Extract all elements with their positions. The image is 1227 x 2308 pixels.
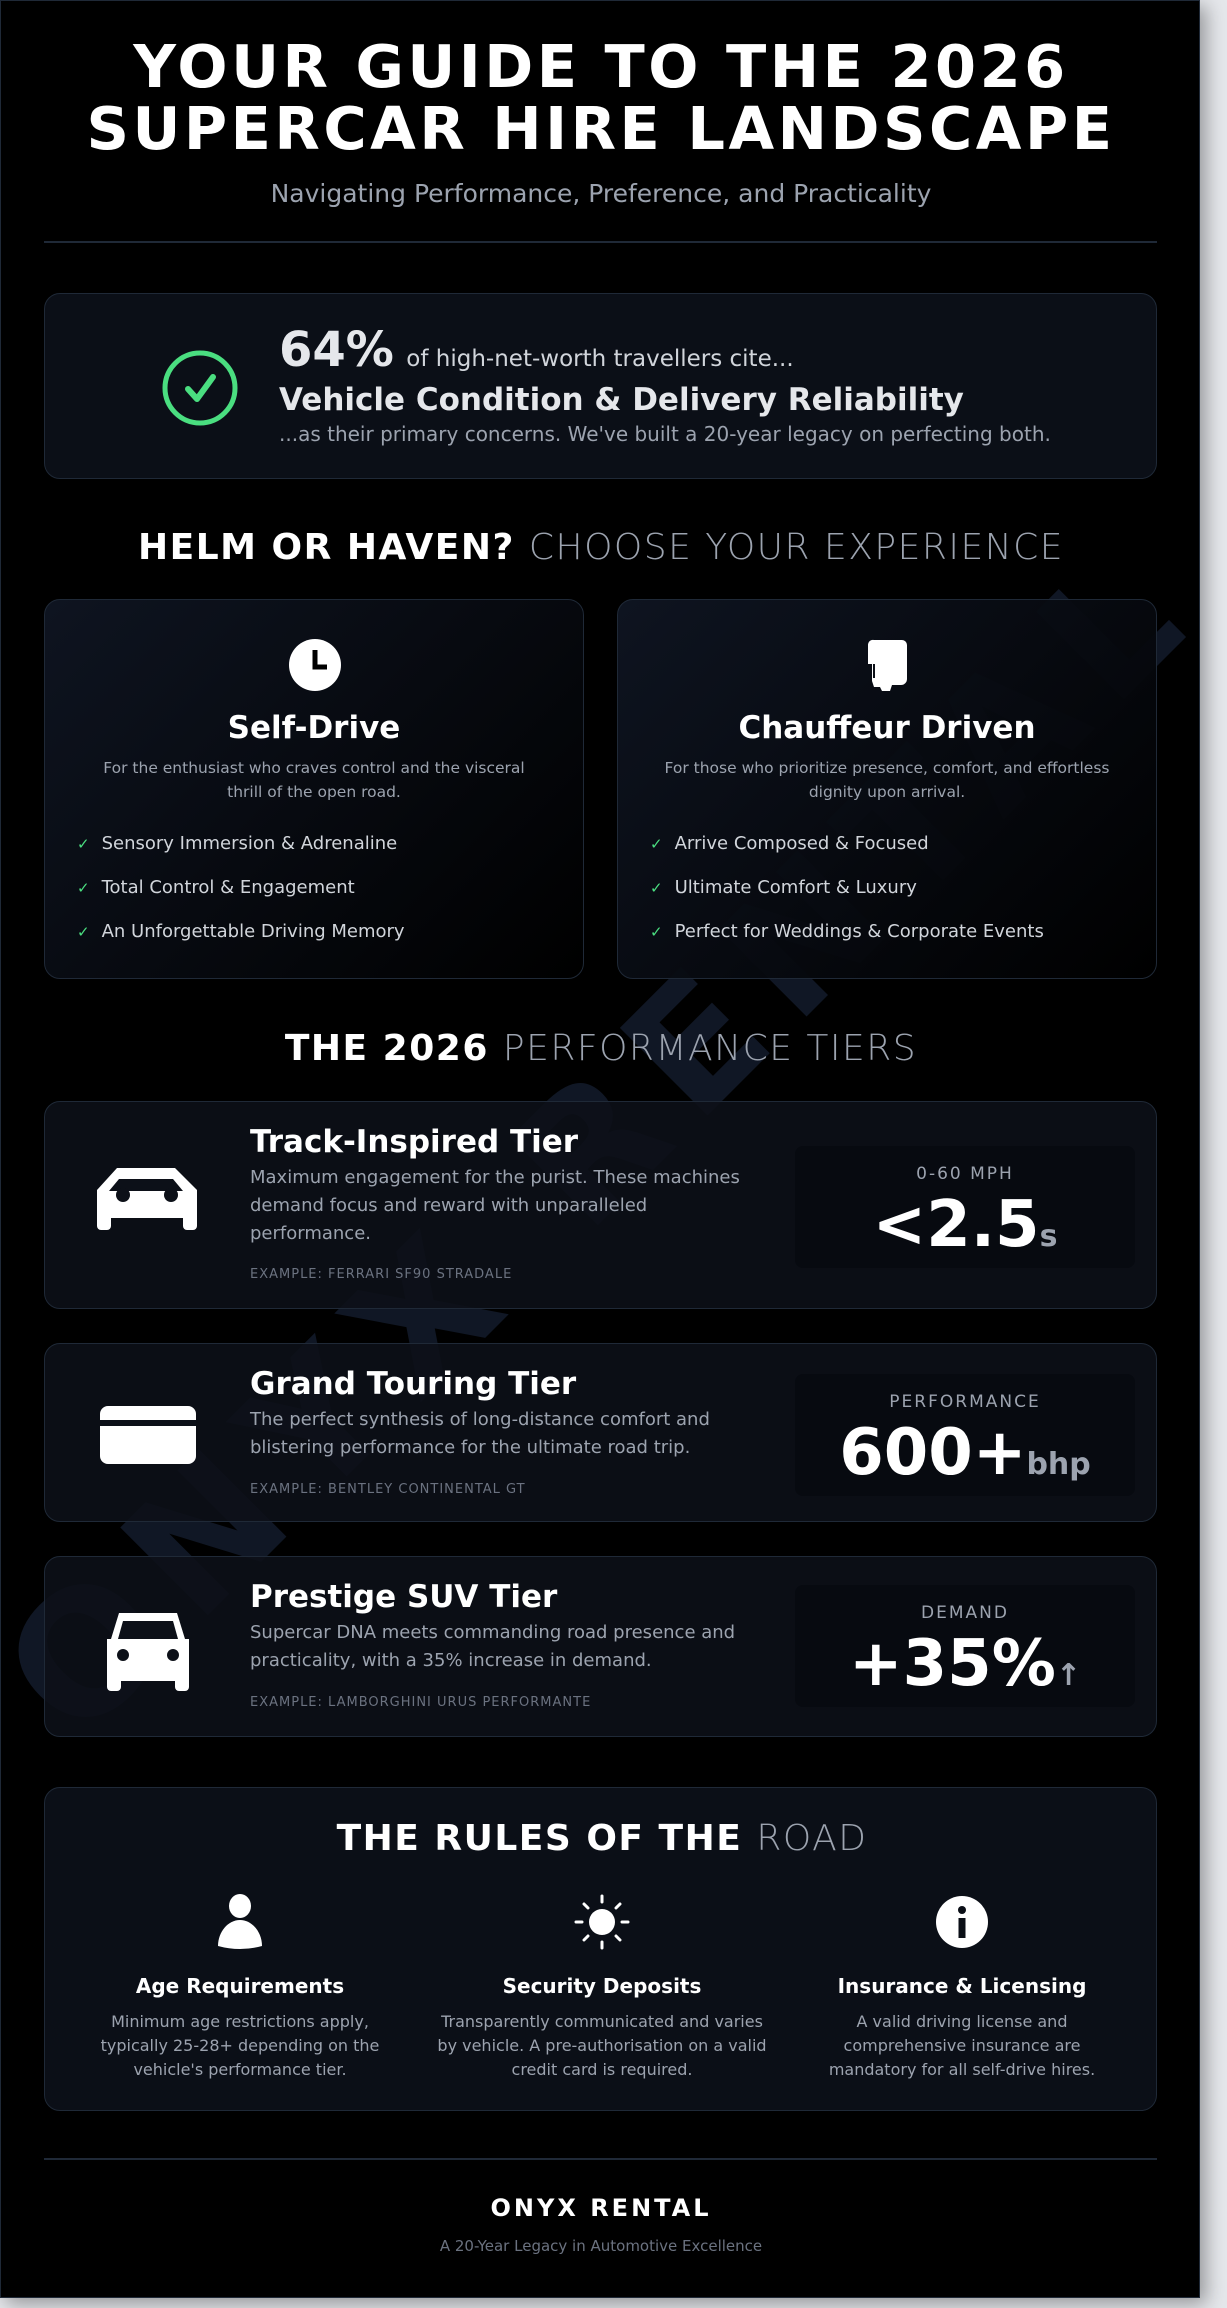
stat text (279, 322, 1051, 446)
panel: grand touring tier: EXAMPLE: BENTLEY CONTINENTAL GT (250, 1482, 526, 1497)
panel: track tier (44, 1101, 1157, 1309)
panel: self-drive: ✓ Total Control & Engagement (77, 877, 355, 898)
panel: track tier: Track-Inspired Tier (250, 1124, 578, 1160)
stat: bhp: 600+bhp (839, 1416, 1091, 1490)
panel: key stat (44, 293, 1157, 479)
icon: check circle (162, 350, 238, 426)
icon: suv (107, 1613, 189, 1691)
title: SUPERCAR HIRE LANDSCAPE (86, 94, 1116, 163)
rule: age: Age Requirements (136, 1974, 344, 1998)
title: YOUR GUIDE TO THE 2026 (133, 32, 1069, 101)
footer brand: ONYX RENTAL (490, 2194, 712, 2222)
heading: helm or haven: HELM OR HAVEN? CHOOSE YOUR EXPERIENCE (138, 527, 1064, 568)
stat: bhp (795, 1374, 1135, 1496)
panel: grand touring tier: Grand Touring Tier (250, 1366, 576, 1402)
stat: 0-60 (795, 1146, 1135, 1268)
panel: grand touring tier (44, 1343, 1157, 1522)
panel: track tier: EXAMPLE: FERRARI SF90 STRADALE (250, 1267, 512, 1282)
panel: self-drive (44, 599, 584, 979)
panel: self-drive: For the enthusiast who craves control and the visceral thrill of the open road. (103, 759, 525, 801)
rule: insurance (829, 1896, 1095, 2079)
panel: chauffeur: Chauffeur Driven (738, 710, 1036, 746)
icon: sun (574, 1894, 630, 1950)
rule: deposits: Transparently communicated and varies by vehicle. A pre-authorisation on a valid credit card is required. (437, 2012, 767, 2079)
icon: hand (868, 640, 907, 691)
footer tagline: A 20-Year Legacy in Automotive Excellence (440, 2237, 762, 2255)
panel: rules of the road: THE RULES OF THE ROAD (337, 1818, 867, 1859)
subtitle: Navigating Performance, Preference, and Practicality (271, 179, 931, 208)
panel: chauffeur: For those who prioritize presence, comfort, and effortless dignity upon arrival. (664, 759, 1109, 801)
stat text: Vehicle Condition & Delivery Reliability (279, 382, 964, 418)
panel: chauffeur: ✓ Perfect for Weddings & Corporate Events (650, 921, 1044, 942)
rule: age: Minimum age restrictions apply, typically 25-28+ depending on the vehicle's performance tier. (101, 2012, 379, 2079)
panel: chauffeur (617, 599, 1157, 979)
stat: bhp: PERFORMANCE (889, 1392, 1041, 1412)
rule: insurance: A valid driving license and comprehensive insurance are mandatory for all self-drive hires. (829, 2012, 1095, 2079)
icon: sports car (97, 1168, 197, 1230)
stat: demand: DEMAND (921, 1603, 1009, 1623)
stat text: ...as their primary concerns. We've built a 20-year legacy on perfecting both. (279, 422, 1051, 446)
panel: self-drive: ✓ Sensory Immersion & Adrenaline (77, 833, 397, 854)
rule: deposits (437, 1894, 767, 2079)
stat: demand: +35%↑ (849, 1627, 1081, 1701)
panel: suv tier: Prestige SUV Tier (250, 1579, 557, 1615)
panel: suv tier: EXAMPLE: LAMBORGHINI URUS PERFORMANTE (250, 1695, 591, 1710)
panel: chauffeur: ✓ Ultimate Comfort & Luxury (650, 877, 917, 898)
panel: self-drive: Self-Drive (228, 710, 400, 746)
panel: grand touring tier: The perfect synthesis of long-distance comfort and blistering performance for the ultimate road trip. (250, 1409, 710, 1458)
panel: rules of the road (44, 1787, 1157, 2111)
panel: suv tier: Supercar DNA meets commanding road presence and practicality, with a 35% increase in demand. (250, 1622, 735, 1671)
stat: 0-60: <2.5s (873, 1188, 1057, 1262)
icon: clock (289, 639, 341, 691)
icon: card (100, 1406, 196, 1464)
panel: chauffeur: ✓ Arrive Composed & Focused (650, 833, 929, 854)
stat text: 64% of high-net-worth travellers cite... (279, 322, 794, 378)
panel: self-drive: ✓ An Unforgettable Driving Memory (77, 921, 405, 942)
rule: age (101, 1894, 379, 2079)
rule: insurance: Insurance & Licensing (838, 1974, 1086, 1998)
icon: person (218, 1894, 262, 1949)
heading: performance tiers: THE 2026 PERFORMANCE TIERS (285, 1028, 917, 1069)
stat: 0-60: 0-60 MPH (916, 1164, 1014, 1184)
panel: track tier: Maximum engagement for the purist. These machines demand focus and reward with unparalleled performance. (250, 1167, 740, 1244)
icon: info (936, 1896, 988, 1948)
rule: deposits: Security Deposits (503, 1974, 701, 1998)
stat: demand (795, 1585, 1135, 1707)
title (86, 32, 1116, 163)
panel: suv tier (44, 1556, 1157, 1737)
